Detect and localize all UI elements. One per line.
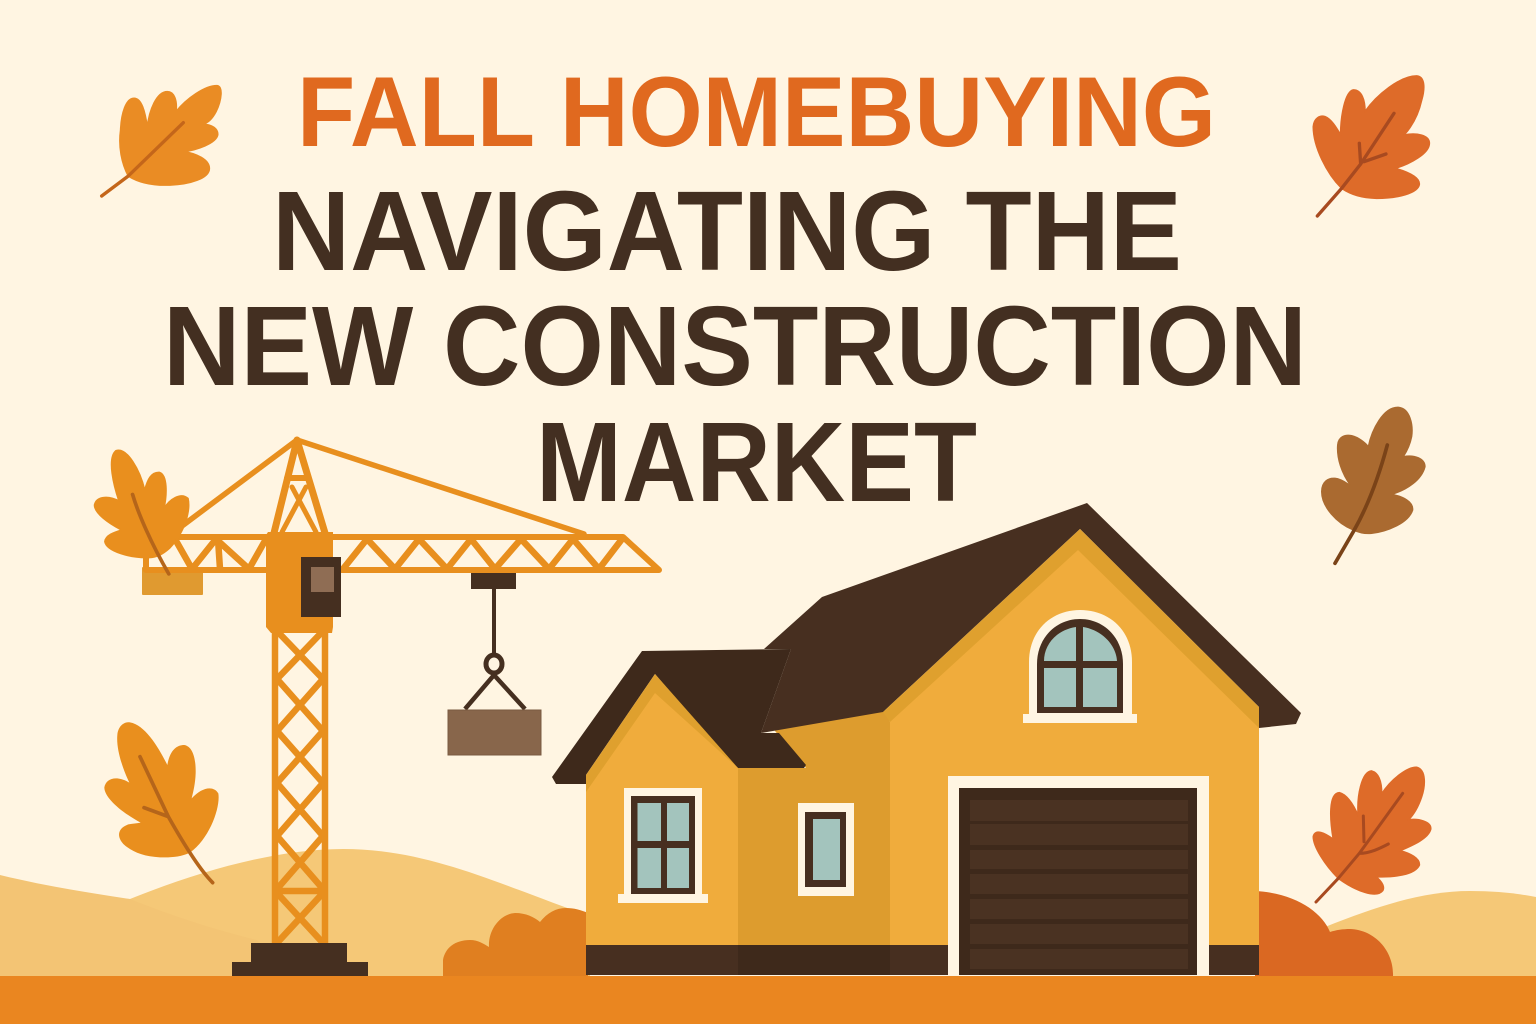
arched attic window: [1023, 610, 1137, 723]
icon: leaf lower right: [1313, 767, 1431, 902]
heading: navigating the new construction market: MARKET: [536, 399, 977, 525]
background hills: [0, 849, 1536, 976]
heading: navigating the new construction market: [163, 168, 1307, 525]
icon: leaf right middle: [1322, 407, 1425, 563]
ground strip: [0, 976, 1536, 1024]
title: [163, 56, 1307, 525]
garage door: [948, 776, 1209, 975]
crane operator block: [266, 532, 333, 633]
crane base: [232, 943, 368, 976]
crane counterweight: [142, 567, 203, 595]
middle window: [798, 803, 854, 896]
house left wall: [586, 674, 738, 945]
bush: right: [1255, 891, 1393, 976]
cab window: [311, 567, 334, 592]
crane cables and top frame: [182, 440, 584, 534]
icon: leaf top right: [1313, 76, 1429, 216]
crane cab: [301, 557, 341, 617]
house main wall: [883, 529, 1259, 945]
icon: leaf top left: [102, 86, 221, 196]
icon: leaf lower left: [104, 722, 219, 883]
bush: left: [443, 908, 588, 976]
crane trolley: [471, 573, 516, 589]
heading: fall homebuying: FALL HOMEBUYING: [297, 56, 1216, 167]
heading: navigating the new construction market: NEW CONSTRUCTION: [163, 283, 1307, 409]
crane mast lattice: [275, 630, 325, 943]
left window: [618, 788, 708, 903]
hanging load: [448, 710, 541, 755]
heading: navigating the new construction market: NAVIGATING THE: [272, 168, 1182, 294]
hook cable and ring: [465, 589, 525, 709]
house: [552, 503, 1301, 975]
house middle wall: [738, 700, 890, 945]
house foundation: [586, 945, 738, 975]
crane boom truss: [146, 537, 659, 570]
construction crane: [142, 440, 659, 976]
house left roof: [552, 649, 806, 784]
icon: leaf on crane: [94, 450, 189, 574]
house main roof: [761, 503, 1301, 733]
